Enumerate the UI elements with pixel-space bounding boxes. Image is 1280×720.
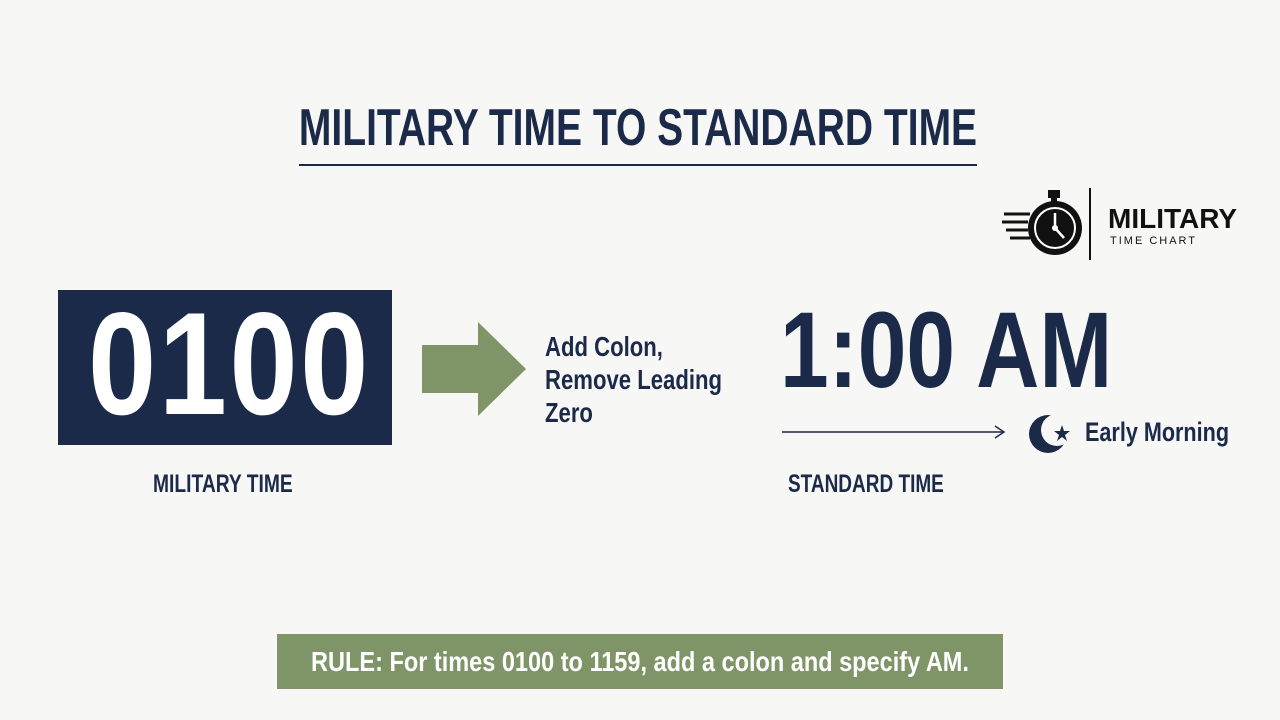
arrow: green [422, 322, 526, 416]
rule banner: RULE: For times 0100 to 1159, add a colon and specify AM. [311, 646, 969, 677]
arrow: thin line [782, 425, 1006, 439]
text: conversion step [545, 331, 722, 428]
logo text: MILITARY [1108, 203, 1237, 234]
rule banner [277, 634, 1003, 689]
logo: military time chart [1002, 188, 1237, 260]
label: standard time: STANDARD TIME [788, 470, 944, 498]
text: conversion step: Zero [545, 397, 593, 428]
text: conversion step: Add Colon, [545, 331, 663, 362]
standard time value: 1:00 AM [780, 289, 1112, 410]
icon: moon and star [1029, 415, 1070, 453]
icon: stopwatch [1002, 190, 1082, 255]
text: early morning: Early Morning [1085, 417, 1229, 447]
label: military time: MILITARY TIME [153, 470, 293, 498]
text: conversion step: Remove Leading [545, 364, 722, 395]
logo: military time chart: TIME CHART [1110, 235, 1197, 247]
title: MILITARY TIME TO STANDARD TIME [299, 99, 977, 157]
